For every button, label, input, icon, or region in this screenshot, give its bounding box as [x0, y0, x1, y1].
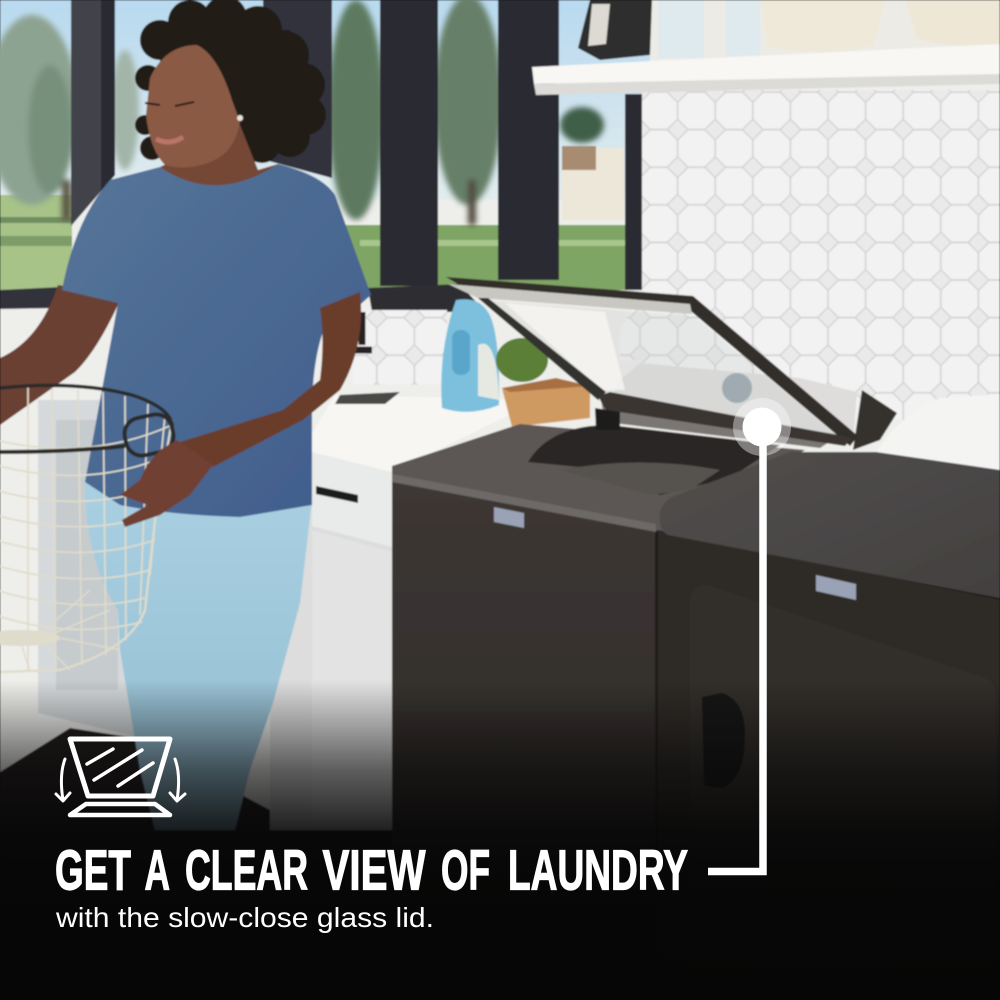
- dryer handle: [702, 693, 745, 788]
- jeans: [85, 480, 312, 830]
- heading: CLEAR: [185, 838, 308, 902]
- hand on basket: [120, 440, 213, 527]
- eyes: [145, 102, 194, 106]
- dryer logo: [816, 575, 856, 600]
- washer body: [392, 424, 805, 900]
- dark gradient band: [0, 680, 1000, 1000]
- detergent bottle: [441, 299, 499, 412]
- heading: VIEW: [322, 838, 426, 902]
- pointer ring: [733, 398, 791, 456]
- floor: [0, 728, 392, 1000]
- washer logo: [494, 507, 524, 528]
- woman: [0, 0, 371, 830]
- washer control panel behind lid: [610, 363, 857, 440]
- countertop and cabinets: [38, 392, 540, 830]
- face: [146, 45, 240, 168]
- wire laundry basket: [0, 385, 176, 672]
- faucet: [354, 312, 372, 350]
- earring: [237, 115, 243, 121]
- basket rim: [0, 385, 172, 430]
- heading: GET: [55, 838, 131, 902]
- basket front rim: [0, 446, 125, 452]
- washer tub opening: [528, 425, 780, 495]
- dryer body: [658, 452, 1000, 1000]
- window frames: [0, 0, 643, 312]
- heading: A: [144, 838, 170, 902]
- far arm: [0, 285, 122, 425]
- tile backsplash: [352, 90, 1000, 420]
- windows with garden view: [0, 0, 650, 290]
- dryer control panel: [876, 394, 1000, 470]
- icon: slow-close glass lid: [56, 739, 185, 815]
- glass lid: [446, 277, 858, 448]
- near arm: [180, 292, 361, 467]
- washer base: [70, 804, 170, 815]
- left arrow: [56, 759, 70, 801]
- heading: [55, 838, 688, 902]
- smile: [156, 137, 183, 142]
- glass reflection lines: [87, 749, 153, 786]
- callout pointer: [708, 398, 791, 872]
- washer and dryer backing: [392, 480, 1000, 1000]
- shirt: [62, 164, 371, 517]
- heading: LAUNDRY: [508, 838, 688, 902]
- plant and wicker basket: [496, 338, 590, 427]
- neck: [160, 125, 278, 196]
- subheading: with the slow-close glass lid.: [55, 902, 434, 933]
- basket handle: [122, 411, 176, 459]
- pointer leader line: [708, 430, 763, 872]
- hair: [135, 0, 326, 163]
- dryer door: [690, 585, 996, 1000]
- heading: OF: [441, 838, 490, 902]
- pointer dot: [742, 408, 782, 446]
- right arrow: [170, 759, 185, 801]
- lid frame: [70, 739, 170, 796]
- wall shelf with items: [532, 0, 1000, 95]
